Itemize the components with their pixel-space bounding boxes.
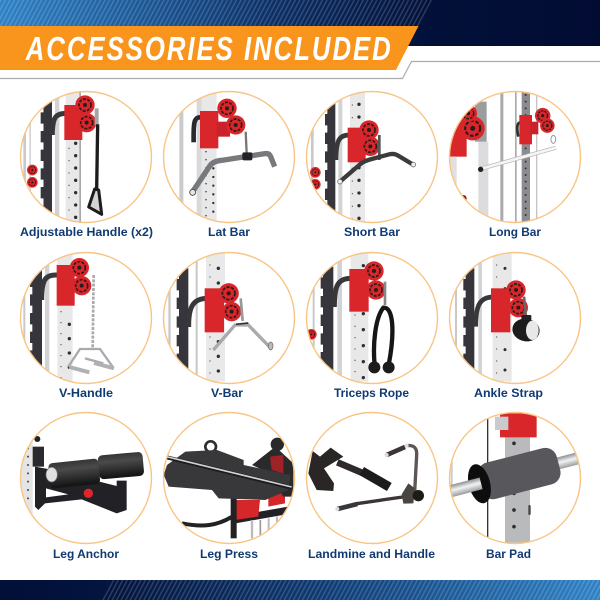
label: Leg Press <box>200 547 258 561</box>
circle border <box>164 252 294 384</box>
label: V-Bar <box>211 386 243 400</box>
circle border <box>20 412 152 544</box>
circle border <box>450 252 580 384</box>
panel: v-bar <box>164 252 294 400</box>
panel: v-handle <box>20 252 152 400</box>
circle border <box>20 252 152 384</box>
circle border <box>164 92 294 222</box>
circle border <box>450 92 580 222</box>
label: Short Bar <box>344 225 400 239</box>
title banner <box>0 26 418 70</box>
label: Landmine and Handle <box>308 547 435 561</box>
panel: lat bar <box>164 92 294 239</box>
circle border <box>164 412 294 544</box>
label: Adjustable Handle (x2) <box>20 225 153 239</box>
label: V-Handle <box>59 386 113 400</box>
label: Ankle Strap <box>474 386 543 400</box>
label: Bar Pad <box>486 547 531 561</box>
panel: adjustable handle <box>20 92 153 239</box>
circle border <box>450 412 580 544</box>
footer band <box>0 580 600 600</box>
panel: long bar <box>450 92 580 239</box>
label: Triceps Rope <box>334 386 409 400</box>
panel: leg anchor <box>20 412 151 561</box>
label: Lat Bar <box>208 225 250 239</box>
header band <box>0 0 600 46</box>
panel: short bar <box>306 92 438 239</box>
panel: leg press <box>164 412 294 561</box>
title: ACCESSORIES INCLUDED <box>25 31 391 68</box>
circle border <box>20 92 152 222</box>
panel: ankle strap <box>450 252 580 400</box>
label: Leg Anchor <box>53 547 119 561</box>
circle border <box>306 252 438 384</box>
panel: triceps rope <box>306 252 438 400</box>
circle border <box>306 92 438 222</box>
label: Long Bar <box>489 225 541 239</box>
header outline stroke <box>0 62 600 78</box>
panel: landmine and handle <box>306 412 438 561</box>
panel: bar pad <box>448 412 582 558</box>
circle border <box>306 412 438 544</box>
